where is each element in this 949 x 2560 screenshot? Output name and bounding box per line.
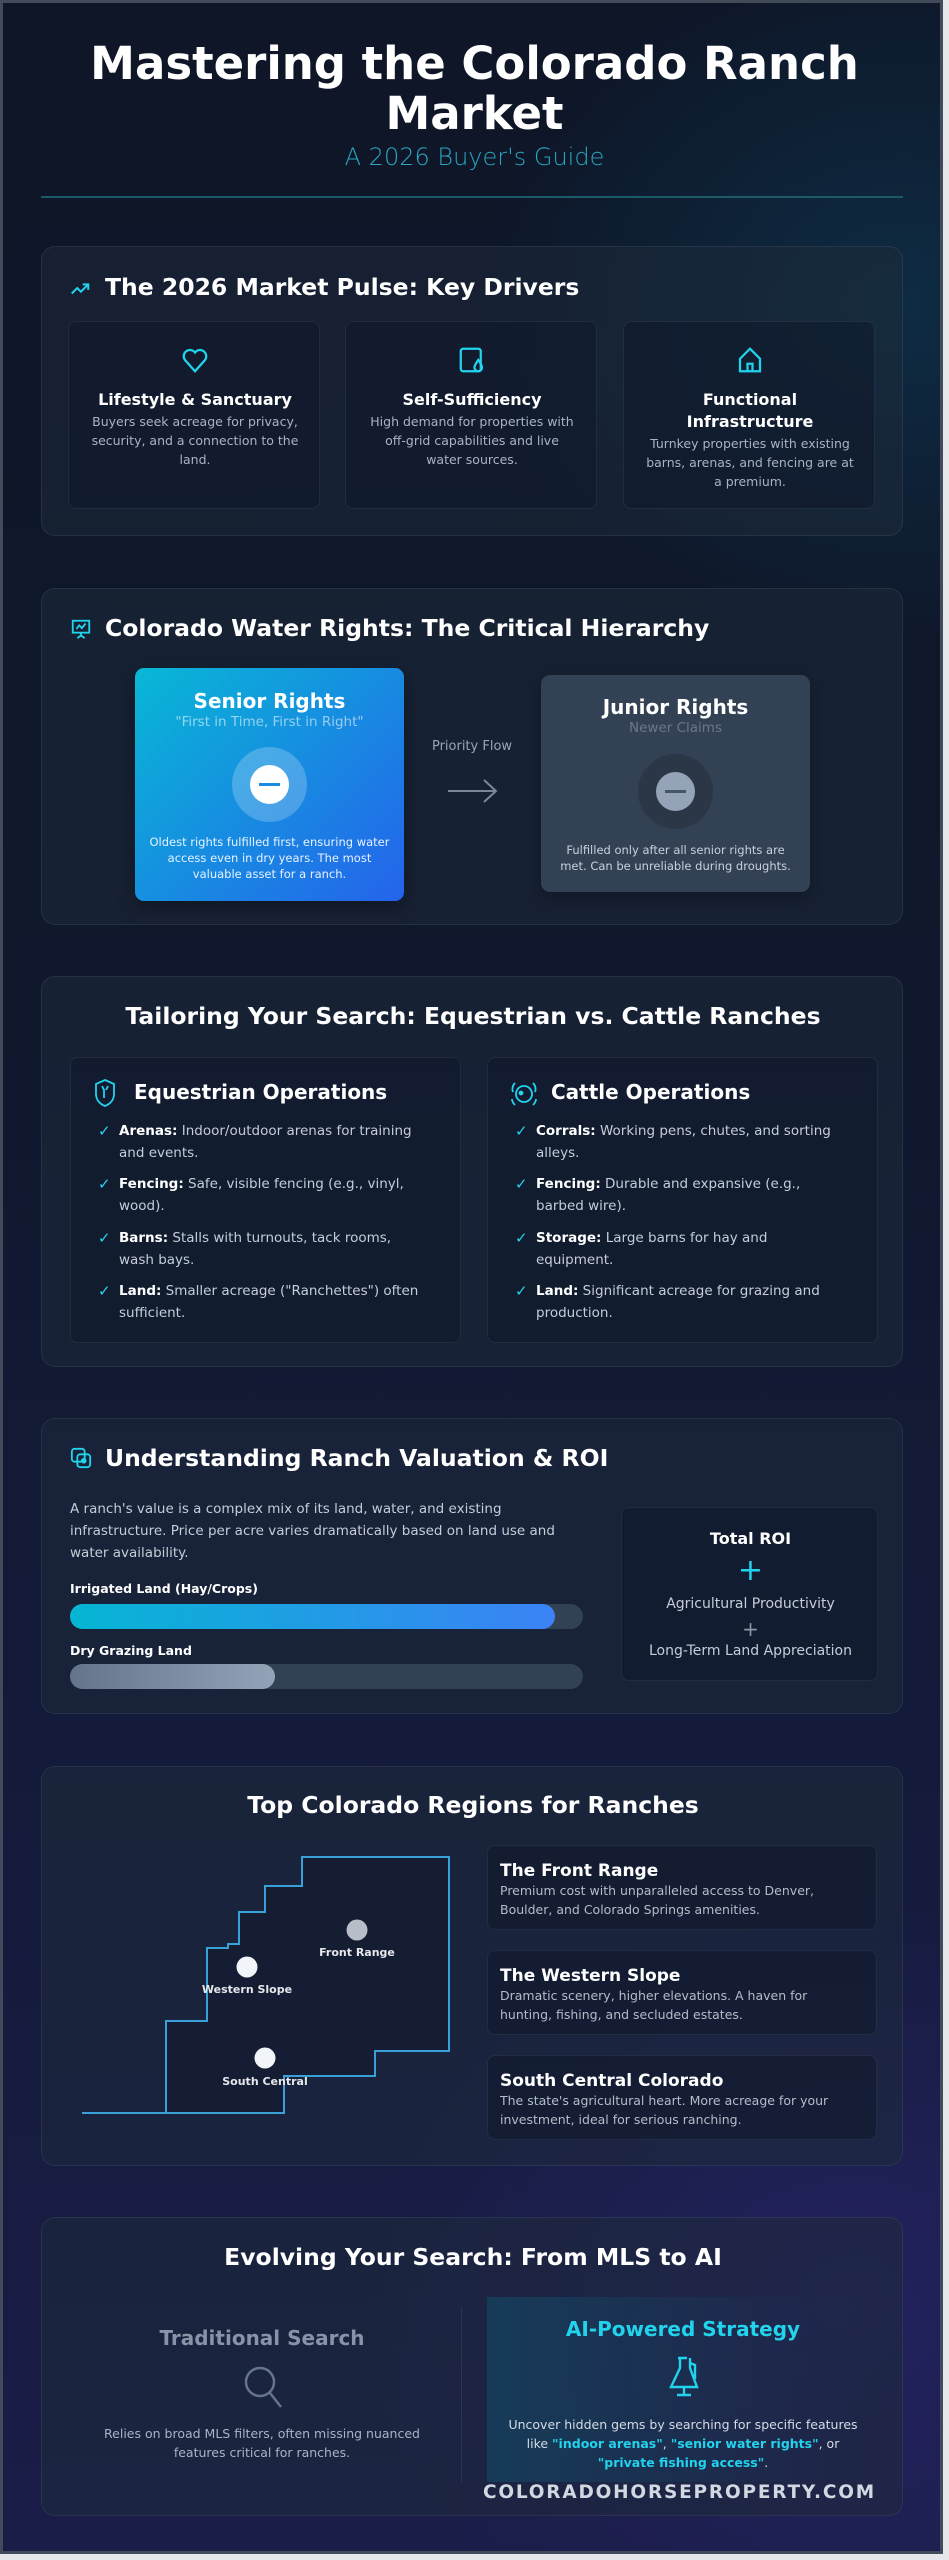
panel: water rights [41,588,903,925]
cattle column: ✓ [515,1122,528,1140]
ROI box: Agricultural Productivity [666,1596,835,1612]
panel: equestrian vs cattle [41,976,903,1367]
card: infrastructure: Turnkey properties with existing barns, arenas, and fencing are at a premium. [646,436,854,489]
panel: regions [41,1766,903,2166]
senior rights card: Senior Rights [194,689,345,713]
cattle column: Land: Significant acreage for grazing and production. [536,1283,820,1321]
cattle column: Storage: Large barns for hay and equipment. [536,1230,767,1268]
cattle column: Fencing: Durable and expansive (e.g., barbed wire). [536,1176,800,1214]
AI strategy: AI-Powered Strategy [566,2317,800,2341]
subtitle: A 2026 Buyer's Guide [345,143,604,171]
cattle column [487,1057,878,1343]
region: south central: South Central Colorado [500,2071,723,2091]
equestrian column: ✓ [98,1229,111,1247]
region: western slope: Dramatic scenery, higher elevations. A haven for hunting, fishing, and secluded estates. [500,1988,807,2022]
equestrian column: Land: Smaller acreage ("Ranchettes") often sufficient. [119,1283,418,1321]
region: front range: Premium cost with unparalleled access to Denver, Boulder, and Colorado Springs amenities. [500,1883,814,1917]
icon: presentation [72,620,90,639]
AI strategy [487,2297,879,2482]
paragraph: A ranch's value is a complex mix of its land, water, and existing infrastructure. Price per acre varies dramatically based on land use and water availability. [70,1501,555,1561]
panel: market pulse [41,246,903,536]
junior rights card: Newer Claims [629,720,722,736]
heading: Evolving Your Search: From MLS to AI [224,2243,722,2271]
card: self-sufficiency: High demand for properties with off-grid capabilities and live water sources. [370,414,574,467]
heading: Tailoring Your Search: Equestrian vs. Cattle Ranches [125,1002,821,1030]
ROI box: + [742,1617,759,1641]
heading: Understanding Ranch Valuation & ROI [105,1444,608,1472]
junior rights card: Junior Rights [603,695,748,719]
traditional search: Traditional Search [159,2326,365,2350]
AI strategy: Uncover hidden gems by searching for specific features like "indoor arenas", "senior water rights", or "private fishing access". [508,2417,858,2470]
region: south central [487,2055,877,2140]
junior rights card [541,675,810,892]
card: lifestyle [68,321,320,509]
arrow: priority flow: Priority Flow [432,739,512,754]
footer brand: COLORADOHORSEPROPERTY.COM [483,2482,876,2503]
card: self-sufficiency: Self-Sufficiency [402,390,542,409]
region: south central: The state's agricultural heart. More acreage for your investment, ideal for serious ranching. [500,2093,828,2127]
ROI box: Long-Term Land Appreciation [649,1643,852,1659]
cattle column: ✓ [515,1229,528,1247]
cattle column: ✓ [515,1282,528,1300]
junior rights card: Fulfilled only after all senior rights are met. Can be unreliable during droughts. [560,843,791,873]
title [90,37,859,140]
cattle column: Cattle Operations [551,1080,750,1104]
heading: The 2026 Market Pulse: Key Drivers [105,273,579,301]
arrow: priority flow [432,739,512,803]
senior rights card: Oldest rights fulfilled first, ensuring water access even in dry years. The most valuable asset for a ranch. [149,835,390,881]
map: South Central [222,2075,308,2088]
bar chart [70,1581,583,1689]
region: western slope [487,1950,877,2035]
title: Mastering the Colorado Ranch [90,37,859,90]
card: infrastructure: Functional [703,390,797,409]
traditional search: Relies on broad MLS filters, often missing nuanced features critical for ranches. [104,2426,420,2460]
region: front range: The Front Range [500,1861,658,1881]
card: infrastructure [623,321,875,509]
card: infrastructure: Infrastructure [687,412,813,431]
ROI box: + [738,1553,763,1588]
card: lifestyle: Buyers seek acreage for privacy, security, and a connection to the land. [92,414,298,467]
icon: trend [71,283,90,294]
cattle column: Corrals: Working pens, chutes, and sorting alleys. [536,1123,831,1161]
title: Market [385,87,564,140]
icon: coins [70,1448,92,1468]
map [82,1856,450,2114]
bar chart: Dry Grazing Land [70,1643,192,1658]
ROI box: Total ROI [710,1529,791,1548]
region: front range [487,1845,877,1930]
equestrian column [70,1057,461,1343]
heading: Top Colorado Regions for Ranches [247,1791,699,1819]
map: Western Slope [202,1983,292,1996]
senior rights card [135,668,404,901]
region: western slope: The Western Slope [500,1966,680,1986]
equestrian column: Barns: Stalls with turnouts, tack rooms, wash bays. [119,1230,391,1268]
ROI box [621,1507,878,1681]
equestrian column: ✓ [98,1122,111,1140]
heading: Colorado Water Rights: The Critical Hierarchy [105,614,709,642]
panel: valuation & ROI [41,1418,903,1714]
card: lifestyle: Lifestyle & Sanctuary [98,390,292,409]
equestrian column: ✓ [98,1282,111,1300]
equestrian column: Equestrian Operations [134,1080,387,1104]
cattle column: ✓ [515,1175,528,1193]
equestrian column: ✓ [98,1175,111,1193]
map: Front Range [319,1946,395,1959]
equestrian column: Fencing: Safe, visible fencing (e.g., vinyl, wood). [119,1176,404,1214]
traditional search [104,2326,420,2460]
equestrian column: Arenas: Indoor/outdoor arenas for training and events. [119,1123,412,1161]
senior rights card: "First in Time, First in Right" [175,714,364,730]
bar chart: Irrigated Land (Hay/Crops) [70,1581,258,1596]
card: self-sufficiency [345,321,597,509]
panel: MLS to AI [41,2217,903,2516]
